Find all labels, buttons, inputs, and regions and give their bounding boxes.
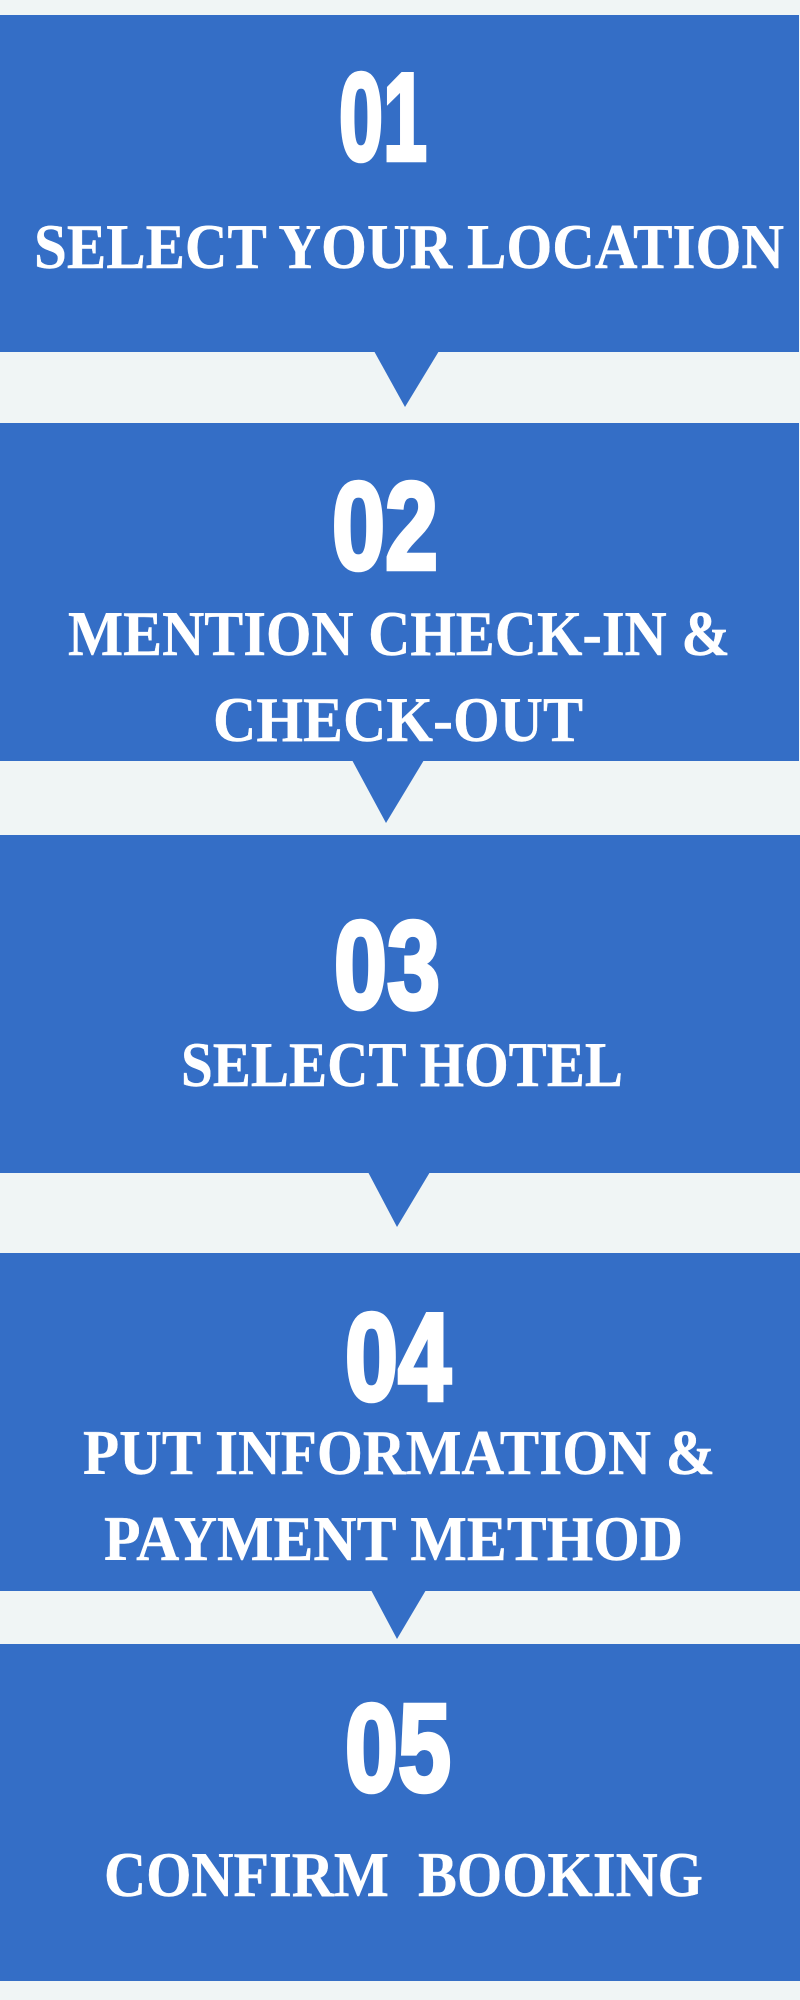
panel: step 2 (0, 423, 799, 823)
panel: step 5 (0, 1644, 800, 1981)
step number 04: 04 (345, 1289, 451, 1427)
heading: mention check-in and check-out: CHECK-OUT (213, 685, 583, 755)
panel: step 4 (0, 1253, 800, 1639)
heading: put information and payment method: PAYMENT METHOD (104, 1504, 683, 1574)
panel background 5 (0, 1644, 800, 1981)
arrow 3 (368, 1172, 430, 1227)
panel: step 1 (0, 15, 799, 407)
arrow 2 (352, 760, 424, 823)
heading: select hotel: SELECT HOTEL (181, 1030, 623, 1100)
panel background 4 (0, 1253, 800, 1591)
step number 01: 01 (339, 49, 427, 187)
panel background 1 (0, 15, 799, 352)
panel background 3 (0, 835, 800, 1173)
arrow 1 (374, 351, 439, 407)
arrow 4 (371, 1590, 426, 1639)
step number 05: 05 (345, 1680, 451, 1818)
panel background 2 (0, 423, 799, 761)
panel: step 3 (0, 835, 800, 1227)
step number 03: 03 (334, 897, 440, 1035)
heading: mention check-in and check-out (68, 599, 730, 755)
heading: put information and payment method (83, 1418, 715, 1574)
heading: mention check-in and check-out: MENTION CHECK-IN & (68, 599, 730, 669)
step number 02: 02 (332, 458, 438, 596)
heading: put information and payment method: PUT INFORMATION & (83, 1418, 715, 1488)
heading: confirm booking: CONFIRM BOOKING (104, 1840, 703, 1910)
